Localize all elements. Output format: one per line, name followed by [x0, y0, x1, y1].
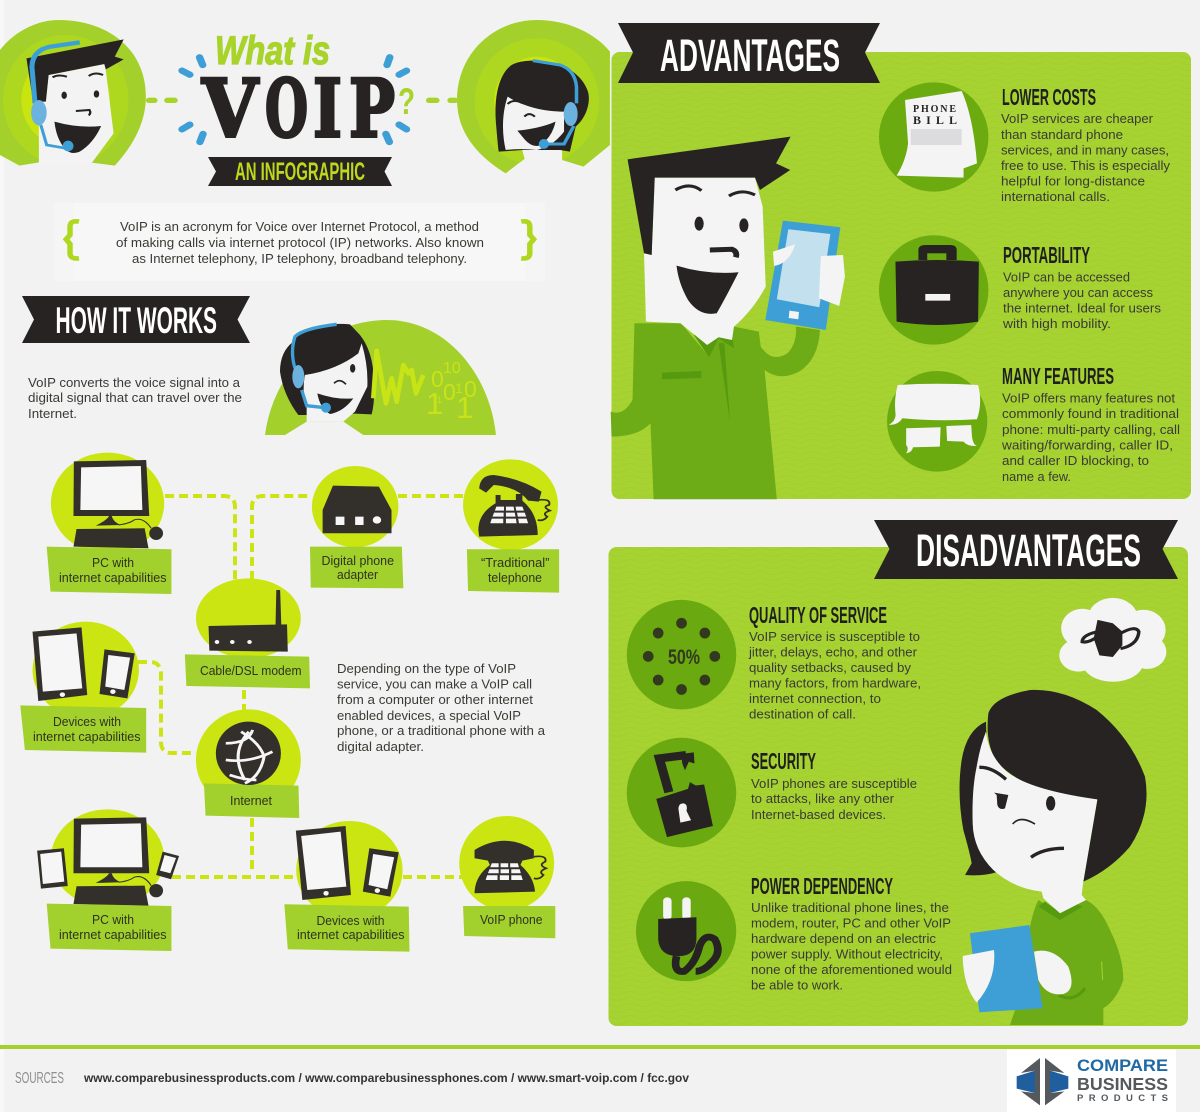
node: internet globe: Internet [230, 794, 273, 808]
heading ribbon: how it works [22, 296, 250, 343]
illustration: voice converted to digital signal: 1 [426, 386, 443, 421]
feature: portability [1002, 242, 1161, 331]
title: VOIP: I [313, 62, 342, 156]
connector dashes: man to title [146, 98, 178, 103]
node: VoIP phone: VoIP phone [480, 913, 543, 927]
illustration: voice converted to digital signal: 10 [443, 360, 461, 377]
feature: quality of service [748, 602, 921, 722]
feature: quality of service: quality setbacks, caused by [749, 660, 912, 675]
title: VOIP: V [201, 62, 260, 156]
feature: power dependency: modem, router, PC and other VoIP [751, 916, 951, 930]
node: digital phone adapter: Digital phone [322, 554, 394, 568]
illustration: voice converted to digital signal: 0 [443, 379, 456, 405]
panel: disadvantages [608, 547, 1188, 1026]
illustration: voice converted to digital signal: 0 [431, 366, 444, 392]
feature: security: to attacks, like any other [751, 791, 895, 806]
node: PC with internet capabilities (bottom): internet capabilities [59, 928, 166, 942]
node: devices with internet capabilities (bottom): Devices with [316, 914, 385, 928]
node: traditional telephone: “Traditional” [481, 556, 550, 570]
illustration: voice converted to digital signal: 1 [456, 390, 473, 425]
intro text block [54, 203, 545, 281]
illustration: frustrated woman [960, 690, 1147, 1025]
connector dashes: title to woman [426, 98, 458, 103]
dashed network connectors [138, 496, 465, 877]
description text: ways to make a VoIP call: from a computer or other internet [337, 692, 533, 707]
icon: electric plug [636, 881, 736, 981]
feature: quality of service: internet connection, to [749, 691, 881, 706]
description text: ways to make a VoIP call: Depending on the type of VoIP [337, 661, 516, 676]
feature: quality of service: QUALITY OF SERVICE [749, 602, 887, 628]
feature: lower costs: than standard phone [1001, 127, 1123, 142]
node: devices with internet capabilities (left): internet capabilities [33, 730, 140, 744]
feature: many features: phone: multi-party calling, call [1002, 422, 1180, 437]
node: devices with internet capabilities (left) [20, 622, 146, 753]
feature: many features [1001, 363, 1180, 484]
title: VOIP: P [349, 62, 395, 156]
intro text block: of making calls via internet protocol (IP) networks. Also known [116, 235, 484, 250]
feature: many features: and caller ID blocking, to [1002, 453, 1149, 468]
sources: SOURCES [15, 1070, 64, 1087]
feature: quality of service: jitter, delays, echo, and other [748, 644, 918, 660]
feature: lower costs: LOWER COSTS [1002, 84, 1096, 110]
character: man with headset [0, 20, 146, 166]
illustration: thought cloud with scribble [1059, 598, 1166, 682]
description text: ways to make a VoIP call [337, 661, 546, 754]
node: devices with internet capabilities (bottom) [284, 821, 409, 952]
subtitle ribbon: an infographic [208, 157, 392, 186]
title: VOIP: O [265, 62, 308, 156]
logo: compare business products [1007, 1049, 1176, 1112]
feature: power dependency [751, 873, 952, 992]
feature: portability: PORTABILITY [1003, 242, 1090, 268]
node: devices with internet capabilities (bottom): internet capabilities [297, 928, 404, 942]
feature: power dependency: Unlike traditional phone lines, the [751, 900, 949, 915]
feature: many features: MANY FEATURES [1002, 363, 1114, 389]
feature: power dependency: be able to work. [751, 978, 843, 992]
feature: many features: commonly found in traditional [1002, 406, 1179, 421]
feature: portability: VoIP can be accessed [1003, 270, 1130, 284]
description text: ways to make a VoIP call: phone, or a traditional phone with a [337, 723, 546, 738]
description text: ways to make a VoIP call: enabled devices, a special VoIP [337, 708, 521, 723]
illustration: man on phone [611, 137, 845, 499]
feature: many features: VoIP offers many features not [1002, 390, 1175, 406]
feature: lower costs: VoIP services are cheaper [1001, 111, 1154, 126]
node: PC with internet capabilities [47, 453, 171, 594]
how it works intro text [28, 375, 242, 421]
feature: portability: with high mobility. [1002, 316, 1111, 331]
feature: lower costs [1001, 84, 1171, 204]
node: traditional telephone [463, 459, 559, 593]
node: internet globe [196, 709, 301, 818]
feature: security: SECURITY [751, 748, 816, 774]
illustration: voice converted to digital signal: 0 [464, 376, 477, 402]
node: VoIP phone [459, 816, 555, 938]
node: PC with internet capabilities: PC with [92, 556, 134, 570]
feature: power dependency: POWER DEPENDENCY [751, 873, 893, 899]
subtitle ribbon: an infographic: AN INFOGRAPHIC [235, 158, 365, 186]
description text: ways to make a VoIP call: service, you can make a VoIP call [337, 676, 532, 692]
icon: briefcase [879, 235, 988, 345]
node: cable/DSL modem: Cable/DSL modem [200, 664, 302, 678]
feature: security: VoIP phones are susceptible [751, 776, 917, 791]
title: question mark: ? [398, 81, 415, 122]
illustration: voice converted to digital signal: 1 [437, 395, 442, 405]
intro text block: VoIP is an acronym for Voice over Internet Protocol, a method [120, 219, 479, 234]
node: devices with internet capabilities (left): Devices with [53, 715, 121, 729]
feature: lower costs: international calls. [1001, 189, 1110, 204]
logo: compare business products: COMPARE [1077, 1057, 1168, 1075]
icon: speech bubbles [887, 371, 987, 472]
icon: 50% quality dial [627, 600, 736, 709]
node: cable/DSL modem [185, 578, 310, 688]
node: traditional telephone: telephone [488, 571, 542, 585]
title: What is: What is [215, 29, 330, 73]
illustration: voice converted to digital signal [265, 320, 496, 435]
feature: quality of service: VoIP service is susceptible to [749, 629, 920, 644]
feature: power dependency: hardware depend on an electric [751, 931, 937, 946]
feature: security: Internet-based devices. [751, 807, 886, 822]
feature: portability: the internet. Ideal for users [1003, 300, 1161, 316]
icon: phone bill: PHONE [913, 104, 956, 115]
sources: www.comparebusinessproducts.com / www.comparebusinessphones.com / www.smart-voip.com / fcc.gov [83, 1071, 689, 1085]
footer rule [0, 1045, 1200, 1049]
logo: compare business products: PRODUCTS [1077, 1093, 1168, 1104]
feature: power dependency: none of the aforementioned would [751, 962, 952, 977]
feature: quality of service: many factors, from hardware, [749, 676, 921, 690]
heading ribbon: advantages: ADVANTAGES [660, 30, 840, 81]
feature: lower costs: services, and in many cases, [1001, 142, 1169, 158]
how it works intro text: digital signal that can travel over the [28, 390, 242, 405]
feature: many features: waiting/forwarding, caller ID, [1001, 438, 1173, 452]
icon: 50% quality dial: 50% [668, 646, 700, 669]
title: VOIP [201, 62, 395, 156]
intro text block: as Internet telephony, IP telephony, broadband telephony. [132, 251, 467, 266]
feature: lower costs: helpful for long-distance [1001, 174, 1145, 188]
node: PC with internet capabilities (bottom): PC with [92, 913, 134, 927]
icon: broken padlock [627, 738, 736, 847]
node: digital phone adapter [310, 466, 403, 588]
title ornament: blue burst ticks [182, 57, 407, 142]
node: digital phone adapter: adapter [337, 568, 378, 582]
feature: many features: name a few. [1002, 469, 1071, 484]
description text: ways to make a VoIP call: digital adapter. [337, 739, 424, 754]
heading ribbon: advantages [618, 23, 880, 83]
node: PC with internet capabilities: internet capabilities [59, 571, 166, 585]
how it works intro text: Internet. [28, 406, 77, 421]
icon: phone bill: BILL [913, 113, 957, 127]
illustration: voice converted to digital signal: 1 [455, 380, 463, 396]
feature: power dependency: power supply. Without electricity, [751, 946, 943, 962]
heading ribbon: how it works: HOW IT WORKS [56, 300, 217, 341]
icon: phone bill [879, 82, 988, 192]
how it works intro text: VoIP converts the voice signal into a [28, 375, 241, 390]
logo: compare business products: BUSINESS [1077, 1074, 1168, 1094]
panel: advantages [611, 52, 1191, 499]
feature: quality of service: destination of call. [749, 706, 856, 722]
feature: lower costs: free to use. This is especially [1001, 158, 1171, 173]
feature: portability: anywhere you can access [1003, 285, 1153, 300]
node: PC with internet capabilities (bottom) [37, 809, 179, 951]
feature: security [751, 748, 917, 822]
character: woman with headset [457, 20, 610, 173]
